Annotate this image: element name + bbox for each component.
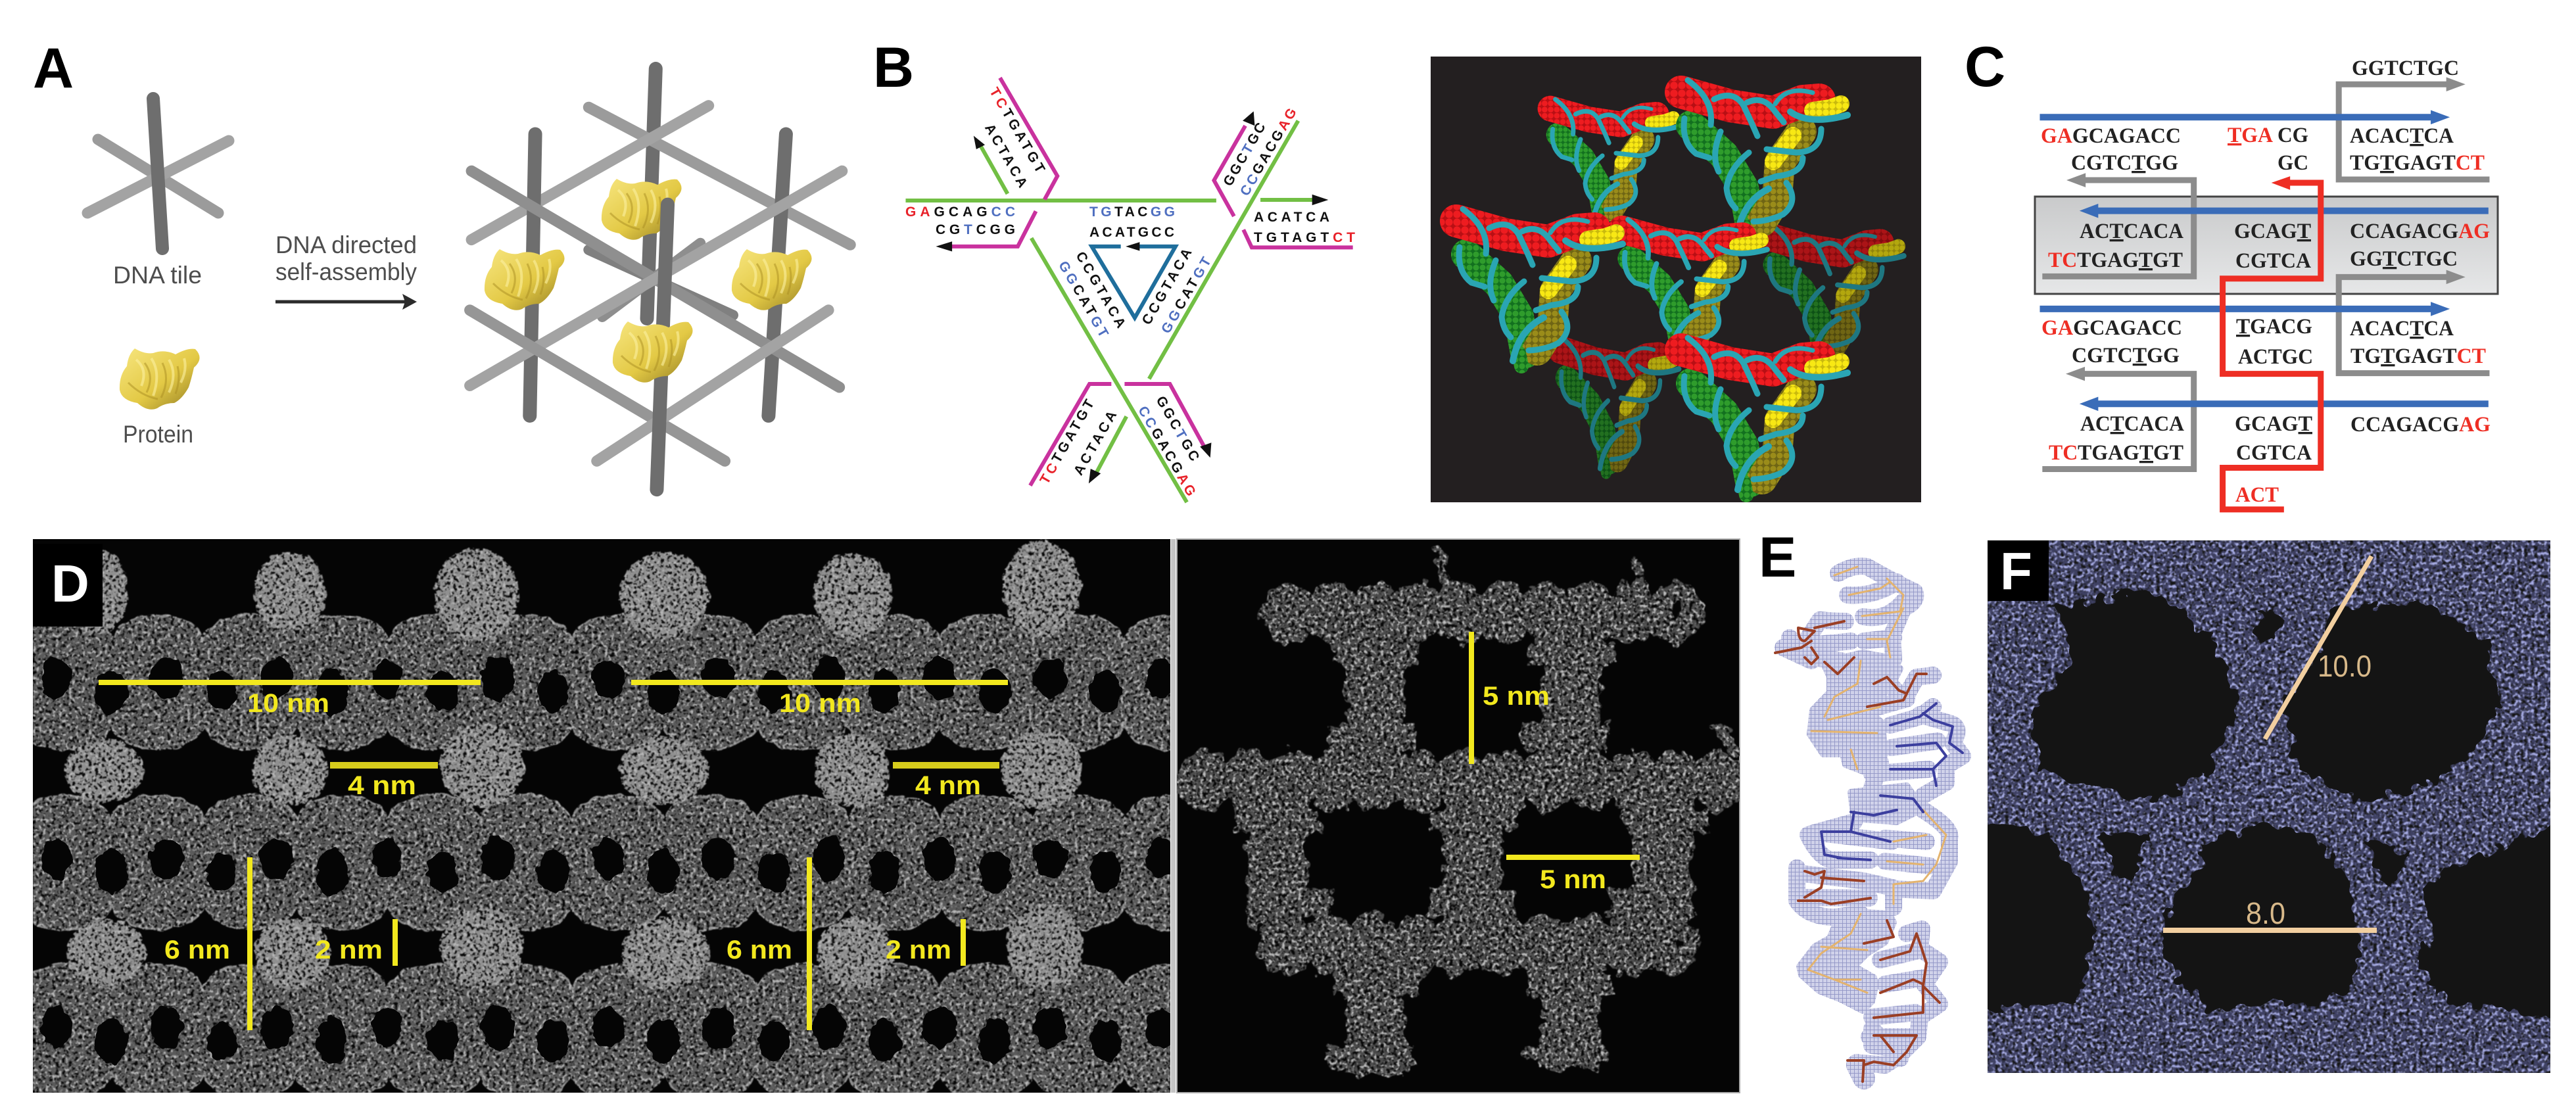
- text: strand sequences: GCAGT: [2234, 220, 2311, 243]
- measure: 4 nm, left: [330, 762, 438, 800]
- measure: 10.0: [2265, 556, 2372, 739]
- text: horizontal base sequences: CG T CGG: [936, 222, 1015, 237]
- measure: 10 nm, left: 10 nm: [247, 689, 329, 718]
- panel B right: 3D DNA tile lattice model: [1431, 57, 1921, 502]
- heading A: A: [33, 37, 74, 100]
- text: horizontal base sequences: [905, 204, 1355, 245]
- label box D: D: [51, 554, 89, 613]
- text: strand sequences: ACTCACA: [2080, 220, 2183, 243]
- text: strand sequences: CG: [2278, 124, 2308, 147]
- measure: 6 nm, right: [727, 857, 812, 1030]
- measure: 2 nm, left: 2 nm: [315, 936, 383, 964]
- text: horizontal base sequences: ACATCA: [1254, 210, 1329, 225]
- measure: 6 nm, left: 6 nm: [164, 936, 230, 964]
- text: horizontal base sequences: GA GCAG CC: [905, 204, 1015, 220]
- text: rotated base sequences: GGCATGT: [1158, 254, 1214, 336]
- measure: 4 nm, left: 4 nm: [348, 771, 416, 800]
- strands: tile strand lines: [905, 78, 1353, 502]
- text: rotated base sequences: TCTGATGT: [1037, 397, 1097, 487]
- measure: 5 nm, horizontal: [1506, 855, 1640, 894]
- measure: 2 nm, left: [315, 919, 398, 966]
- heading C: C: [1965, 36, 2005, 99]
- label: DNA directed self-assembly: DNA directed: [275, 231, 417, 258]
- diagram: density mesh and sticks: [1775, 566, 1963, 1081]
- panel D right: top view hexagonal lattice: [1177, 539, 1782, 1093]
- measure: 8.0: 8.0: [2246, 896, 2285, 930]
- text: strand sequences: GCAGT: [2235, 412, 2312, 436]
- panel C: strand sequence diagram: [1965, 36, 2498, 510]
- text: strand sequences: TGTGAGTCT: [2350, 345, 2486, 368]
- text: rotated base sequences: CCGACGAG: [1237, 105, 1299, 199]
- measure: 8.0: [2163, 896, 2377, 933]
- text: rotated base sequences: [982, 85, 1299, 498]
- heading B: B: [873, 36, 914, 99]
- text: strand sequences: TCTGAGTGT: [2049, 441, 2183, 465]
- text: rotated base sequences: GGCATGT: [1056, 258, 1112, 340]
- label box F: F: [2000, 542, 2032, 600]
- text: rotated base sequences: CCGACGAG: [1135, 404, 1199, 498]
- label: DNA directed self-assembly: self-assembly: [275, 258, 417, 285]
- text: strand sequences: GAGCAGACC: [2041, 124, 2181, 148]
- panel D left: side view lattice with proteins: [20, 539, 1216, 1099]
- text: rotated base sequences: GGCTGC: [1153, 394, 1202, 463]
- measure: 6 nm, left: [164, 857, 252, 1030]
- measure: 10 nm, right: [631, 680, 1008, 718]
- text: horizontal base sequences: TGTACGG: [1089, 204, 1175, 220]
- measure: 5 nm, horizontal: 5 nm: [1540, 865, 1606, 894]
- text: strand sequences: CGTCA: [2236, 441, 2312, 465]
- label: DNA tile: DNA tile: [113, 262, 202, 289]
- strands: blue, gray and red arrows: [2039, 77, 2489, 510]
- panel A: DNA tile self-assembly: [33, 37, 850, 490]
- text: strand sequences: CCAGACGAG: [2350, 413, 2491, 437]
- text: strand sequences: ACACTCA: [2350, 317, 2454, 341]
- label: DNA directed self-assembly: [275, 231, 417, 285]
- panel E: electron density map of a DNA strand: [1759, 526, 1963, 1081]
- text: strand sequences: TGACG: [2236, 315, 2312, 339]
- measure: 5 nm, vertical: [1469, 632, 1550, 764]
- text: strand sequences: CCAGACGAG: [2350, 220, 2490, 243]
- mesh: hexagonal DNA framework: [1179, 551, 1782, 1075]
- icon: DNA tile: [87, 99, 229, 249]
- text: strand sequences: TGTGAGTCT: [2350, 151, 2485, 175]
- heading E: E: [1759, 526, 1796, 589]
- text: strand sequences: CGTCTGG: [2071, 151, 2178, 175]
- text: strand sequences: ACT: [2235, 483, 2279, 507]
- measure: 10 nm, left: [99, 680, 481, 718]
- text: rotated base sequences: GGCTGC: [1220, 120, 1269, 189]
- text: strand sequences: ACTCACA: [2080, 412, 2184, 436]
- measure: 2 nm, right: 2 nm: [886, 936, 951, 964]
- text: horizontal base sequences: TGTAGT CT: [1254, 230, 1355, 245]
- label box F: [1988, 540, 2049, 601]
- measure: 4 nm, right: [893, 762, 999, 800]
- text: strand sequences: ACACTCA: [2350, 124, 2454, 148]
- highlighted tile box: [2035, 197, 2498, 294]
- text: strand sequences: CGTCTGG: [2072, 344, 2180, 368]
- text: strand sequences: TCTGAGTGT: [2048, 249, 2183, 272]
- measure: 10.0: 10.0: [2318, 649, 2372, 683]
- text: strand sequences: GC: [2278, 151, 2308, 175]
- measure: 6 nm, right: 6 nm: [727, 936, 792, 964]
- icon: protein: [120, 348, 200, 410]
- text: strand sequences: GGTCTGC: [2350, 247, 2458, 271]
- text: rotated base sequences: TCTGATGT: [987, 85, 1048, 176]
- measure: 2 nm, right: [886, 919, 966, 966]
- arrow: self-assembly: [275, 294, 417, 310]
- mesh: DNA helices and protein spheres: [20, 541, 1216, 1099]
- text: rotated base sequences: CCGTACA: [1073, 249, 1128, 331]
- text: rotated base sequences: ACTACA: [1071, 408, 1120, 478]
- text: strand sequences: GAGCAGACC: [2041, 316, 2182, 340]
- text: rotated base sequences: ACTACA: [982, 121, 1030, 191]
- panel B: sequence tile diagram: [873, 36, 1355, 502]
- text: horizontal base sequences: ACATGCC: [1089, 225, 1174, 240]
- diagram: lattice with proteins: [470, 69, 850, 490]
- measure: 5 nm, vertical: 5 nm: [1483, 682, 1550, 711]
- label: Protein: Protein: [123, 421, 193, 448]
- text: strand sequences: ACTGC: [2238, 345, 2313, 369]
- text: strand sequences: GGTCTGC: [2352, 57, 2459, 80]
- mesh: lavender lattice bands: [1977, 540, 2566, 1073]
- measure: 10 nm, right: 10 nm: [779, 689, 861, 718]
- text: strand sequences: CGTCA: [2235, 249, 2311, 273]
- text: rotated base sequences: CCGTACA: [1139, 246, 1195, 327]
- text: strand sequences: TGA: [2228, 124, 2273, 147]
- label box D: [33, 544, 103, 627]
- panel F: lattice with cavity dimensions: [1977, 540, 2566, 1073]
- measure: 4 nm, right: 4 nm: [915, 771, 981, 800]
- text: strand sequences: [2041, 57, 2491, 507]
